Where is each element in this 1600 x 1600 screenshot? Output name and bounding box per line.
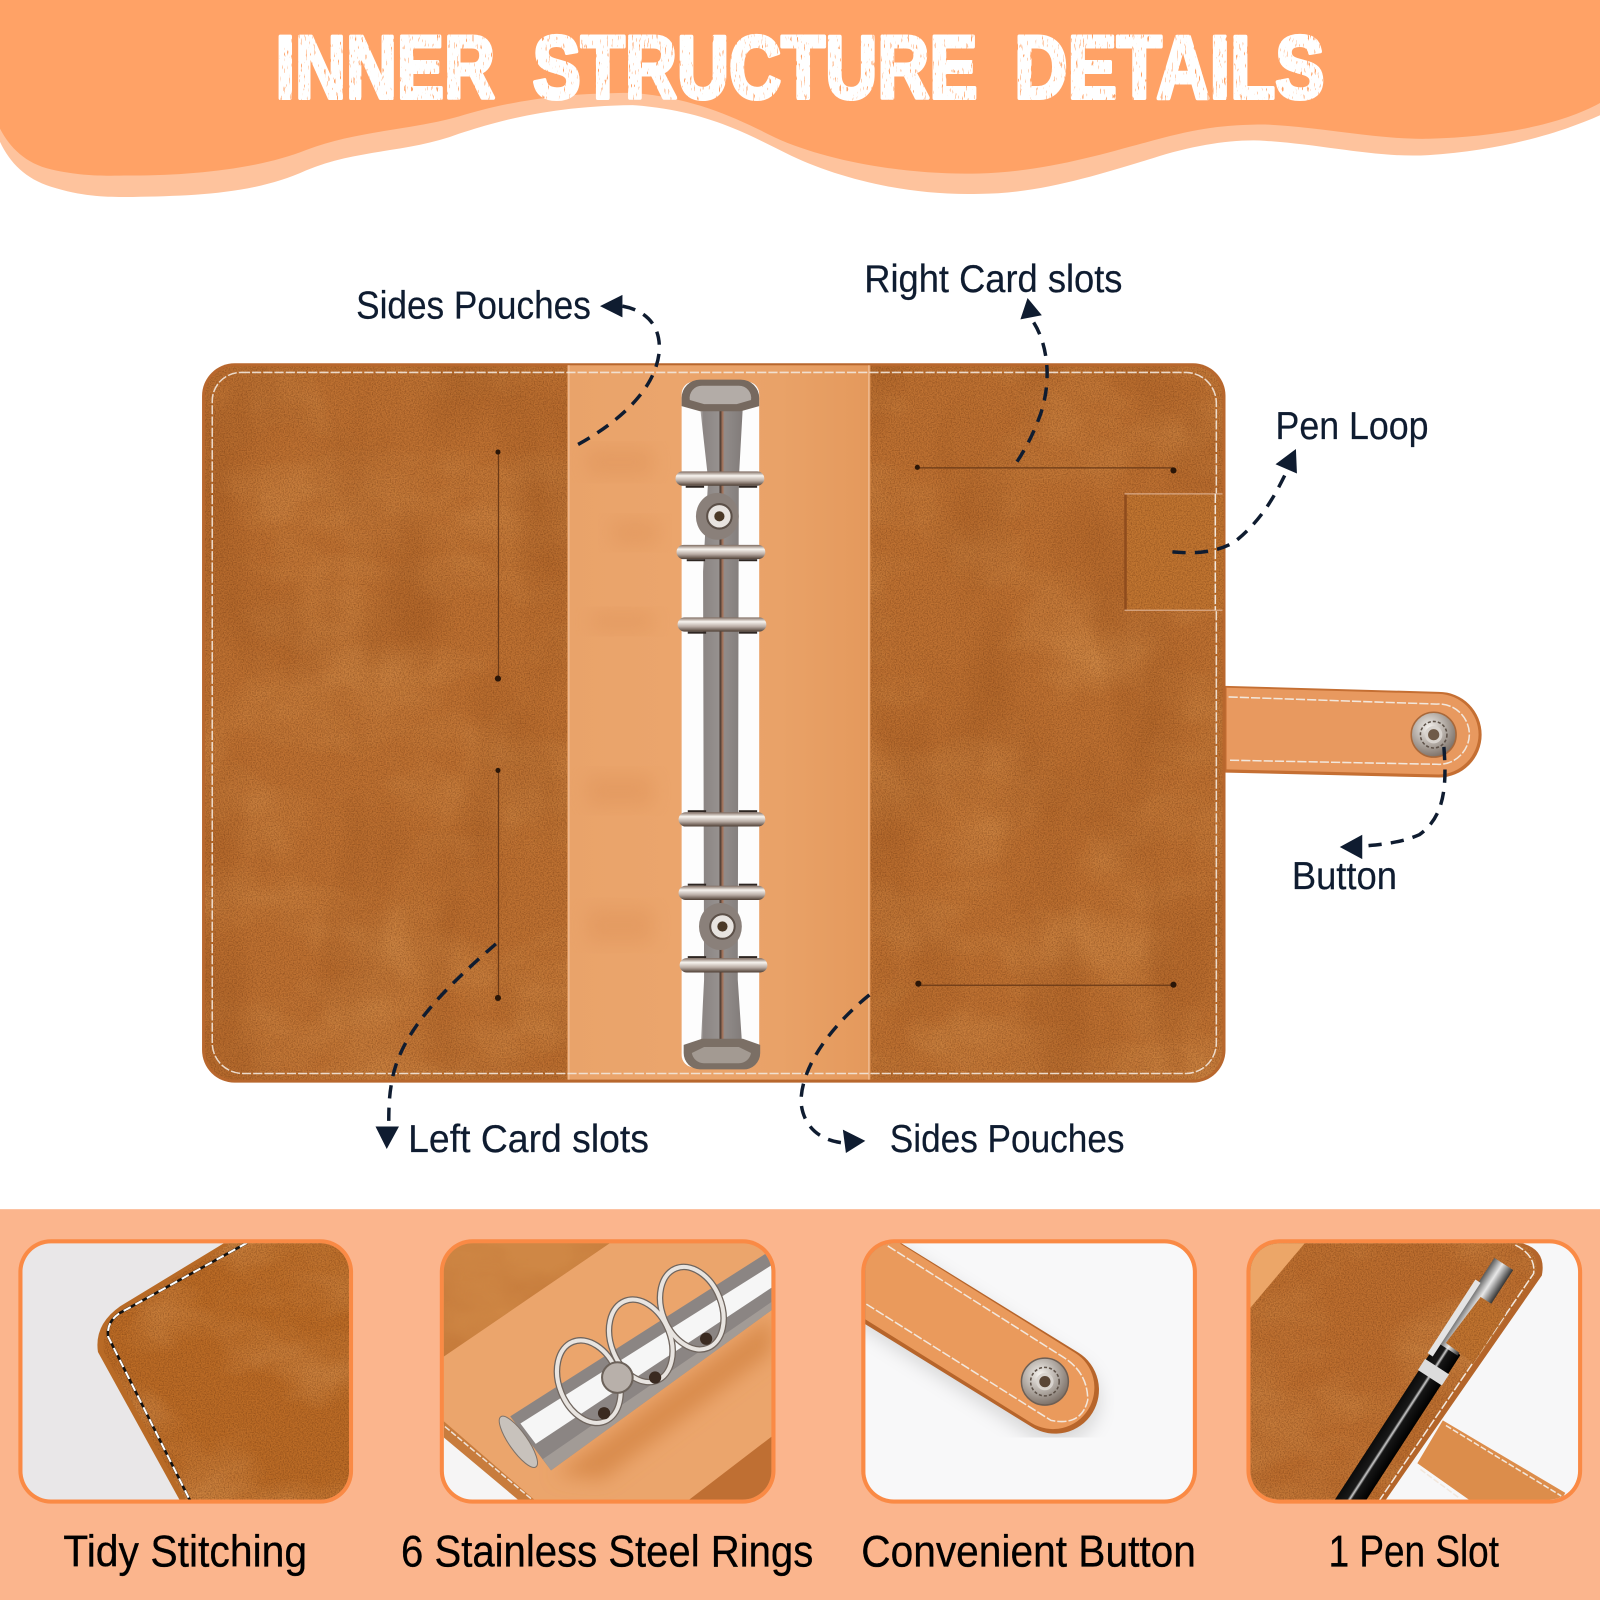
callout: Sides Pouches bottom (801, 995, 1124, 1161)
caption: 6 Stainless Steel Rings: 6 Stainless Steel Rings (401, 1525, 813, 1576)
panel: one pen slot (1246, 1239, 1582, 1518)
six rings (676, 471, 767, 972)
ring shadows (686, 486, 757, 958)
callout: Sides Pouches top (356, 284, 659, 447)
callout: Sides Pouches top: Sides Pouches (356, 284, 591, 327)
right card slots (915, 465, 1177, 988)
leather cover (202, 363, 1226, 1083)
callout: Right Card slots: Right Card slots (864, 258, 1122, 301)
centre frosted sleeve (567, 365, 870, 1080)
ring mechanism (676, 380, 767, 1069)
callout: Right Card slots (864, 258, 1122, 467)
pen strap (1417, 1420, 1565, 1500)
caption: Convenient Button: Convenient Button (861, 1525, 1196, 1576)
rings (554, 1264, 727, 1426)
binder product (202, 363, 1482, 1083)
header banner (0, 0, 1600, 197)
perimeter stitching (212, 372, 1216, 1073)
panel: convenient button (847, 1239, 1197, 1504)
left card slots (495, 449, 501, 1001)
bottom feature band (0, 1209, 1600, 1600)
panel: six stainless steel rings (440, 1239, 776, 1504)
callout: Pen Loop (1164, 405, 1429, 553)
pen (1335, 1258, 1514, 1500)
rivets (696, 493, 742, 950)
pen loop (1124, 494, 1223, 610)
callout: Pen Loop: Pen Loop (1276, 405, 1429, 448)
callout: Left Card slots (376, 944, 649, 1161)
caption: 1 Pen Slot: 1 Pen Slot (1329, 1525, 1499, 1576)
caption: Tidy Stitching: Tidy Stitching (63, 1525, 307, 1576)
callout: Left Card slots: Left Card slots (408, 1118, 649, 1161)
title: DETAILS (1014, 18, 1324, 117)
panel: tidy stitching (18, 1239, 353, 1504)
callout: Button (1292, 747, 1445, 898)
callout: Button: Button (1292, 855, 1397, 898)
title (276, 18, 1324, 117)
title: INNER (276, 18, 495, 117)
callout: Sides Pouches bottom: Sides Pouches (890, 1118, 1124, 1161)
strap with snap button (1220, 686, 1482, 778)
title: STRUCTURE (533, 18, 978, 117)
